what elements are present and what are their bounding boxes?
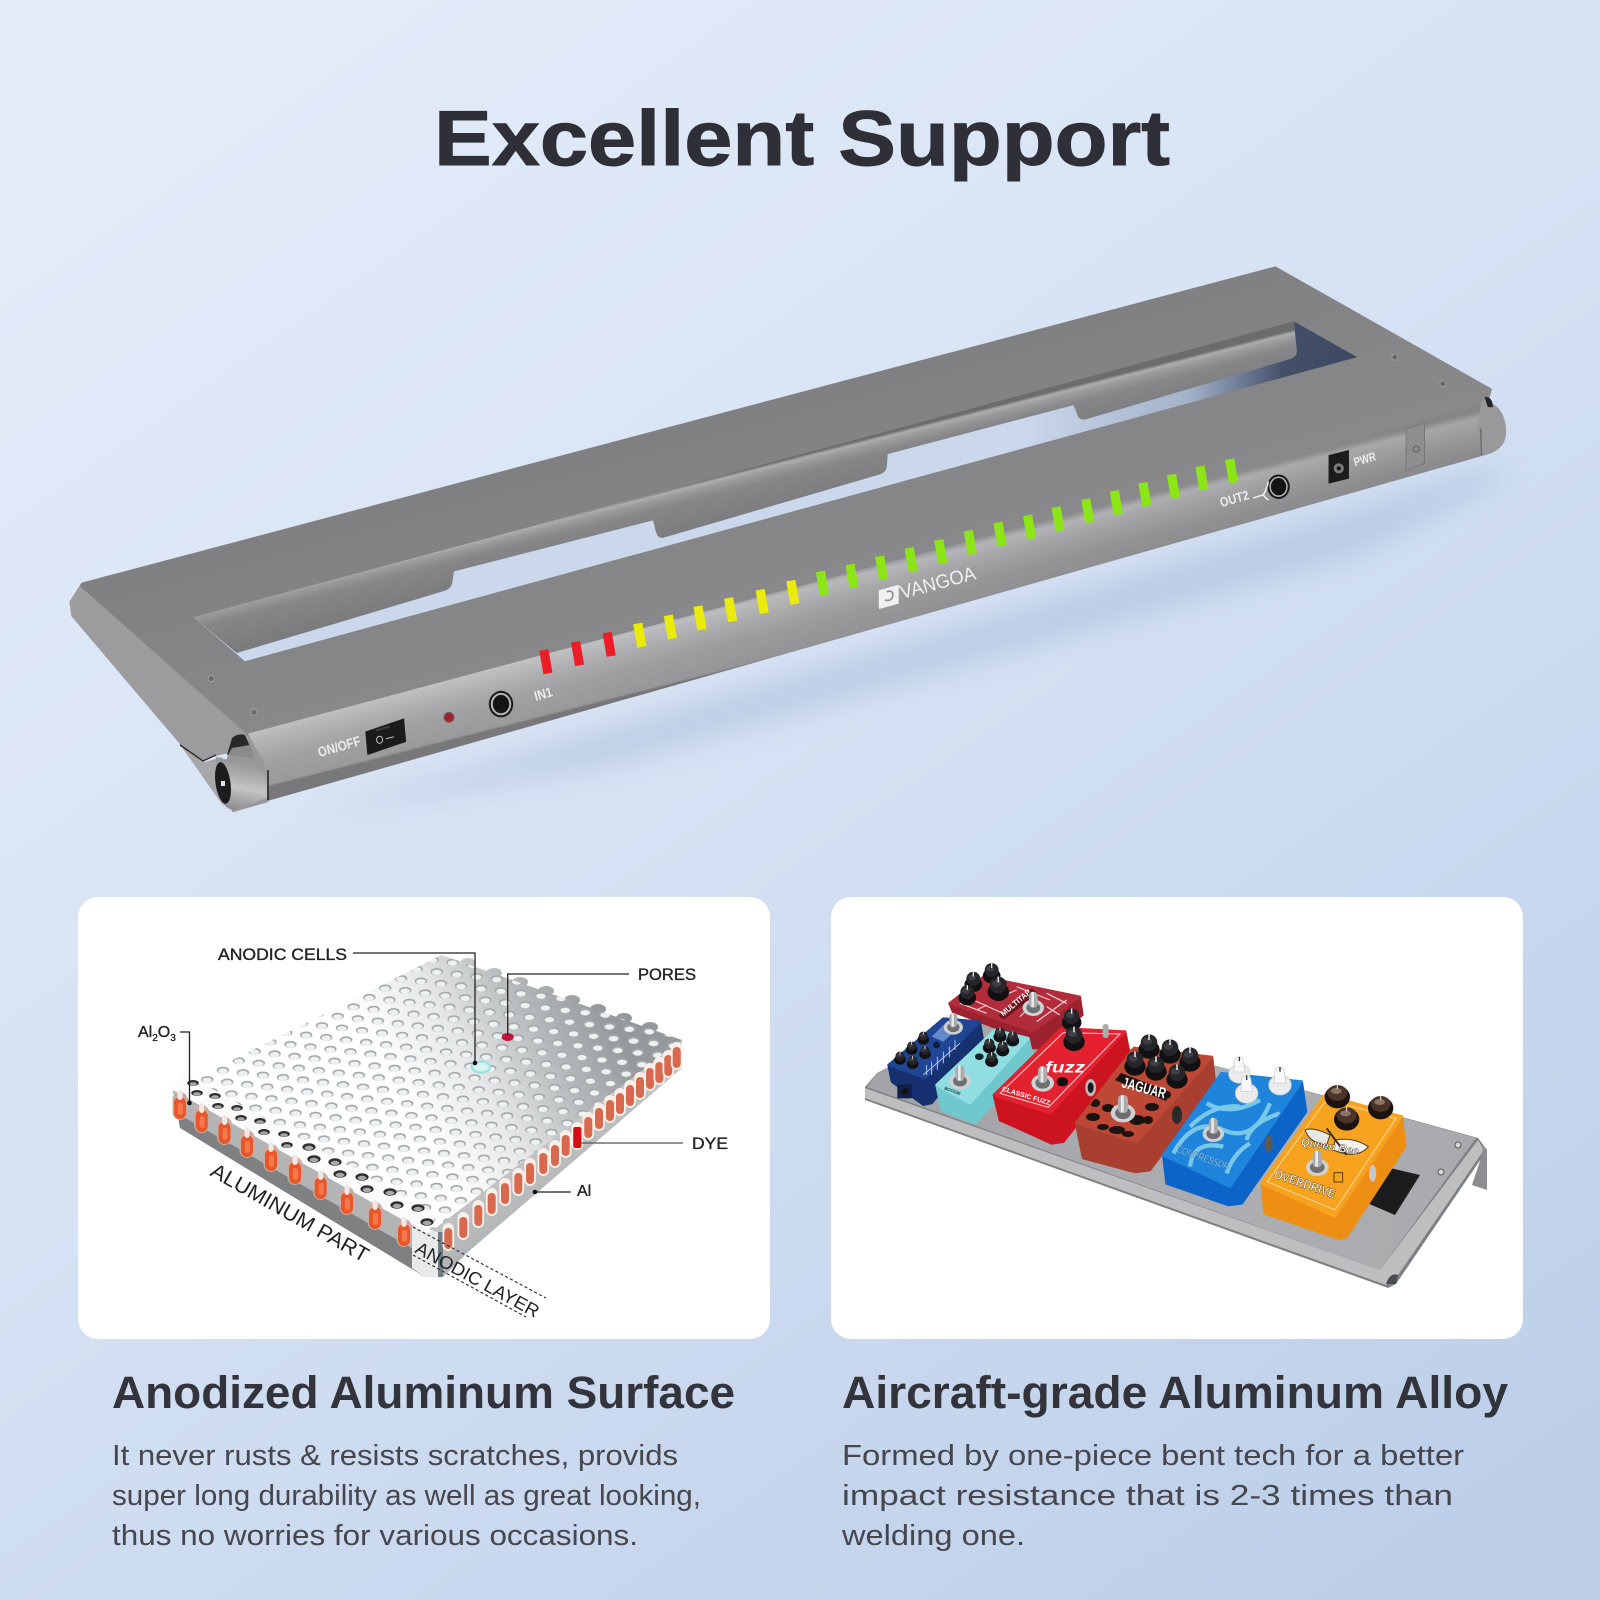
pedal: red fuzz: fuzz — [1045, 1060, 1085, 1077]
pedal: red fuzz: CLASSIC FUZZ — [1001, 1086, 1051, 1107]
dark pores along front-left — [187, 1080, 434, 1226]
left dye tubes — [172, 1090, 412, 1247]
pedal: orange overdrive: Queen Bee — [1300, 1136, 1360, 1158]
hinge barrel — [215, 757, 267, 810]
right hinge — [1478, 397, 1506, 456]
power switch — [365, 718, 406, 755]
board left bent edge — [69, 586, 250, 760]
body copy right: welding one. — [841, 1520, 1025, 1552]
top face — [173, 955, 682, 1234]
pedal: blue compressor: COMPRESSOR — [1175, 1144, 1231, 1173]
title: Excellent Support — [434, 94, 1170, 182]
board top surface — [69, 266, 1492, 739]
right clip — [1406, 423, 1424, 470]
diagram: anodic layer block — [172, 955, 682, 1277]
label aluminum part: ALUMINUM PART — [207, 1159, 373, 1267]
bee wings — [1305, 1129, 1330, 1145]
pedal: teal: BOOGIE — [944, 1086, 962, 1096]
label ON/OFF: ON/OFF — [316, 734, 362, 760]
cut strip — [412, 1226, 443, 1277]
roll curl — [1386, 1274, 1398, 1284]
scalloped back edge — [460, 958, 658, 1032]
pedal: red multi — [949, 963, 1083, 1048]
label IN1: IN1 — [532, 684, 554, 704]
board front face — [248, 403, 1494, 801]
label dye: DYE — [692, 1135, 728, 1153]
slot in plate — [1367, 1168, 1420, 1215]
VANGOA logo: VANGOA — [898, 562, 978, 604]
plate top — [867, 1020, 1476, 1270]
label PWR: PWR — [1352, 450, 1378, 469]
leader dots — [187, 1061, 537, 1194]
right side face — [428, 1040, 682, 1277]
barrel end cap — [213, 761, 233, 805]
pedal: brown jaguar — [1076, 1034, 1215, 1172]
label Al2O3: Al — [138, 1024, 152, 1041]
label OUT2: OUT2 — [1218, 487, 1251, 510]
highlighted dye tube — [573, 1127, 581, 1148]
pedalboard plate — [865, 1020, 1487, 1288]
screws — [208, 354, 1446, 715]
pedal: brown jaguar: JAGUAR — [1120, 1074, 1168, 1103]
pore pattern — [173, 955, 682, 1234]
LED level strip — [544, 459, 1234, 673]
anodic layer dashed bracket — [413, 1227, 546, 1317]
pedal: orange overdrive: OVERDRIVE — [1272, 1167, 1337, 1201]
body copy right: impact resistance that is 2-3 times than — [842, 1480, 1453, 1512]
heading: aircraft-grade aluminum alloy: Aircraft-grade Aluminum Alloy — [842, 1367, 1508, 1418]
pedal: red fuzz — [994, 1009, 1130, 1143]
output jack — [1253, 474, 1290, 500]
cell marker — [472, 1062, 490, 1072]
pedal: navy — [888, 1013, 983, 1105]
bent lip — [1472, 1145, 1487, 1190]
plate rim highlight — [865, 1088, 1484, 1285]
hinge notch — [227, 734, 252, 755]
left feature text — [112, 1367, 735, 1552]
power LED — [444, 712, 454, 722]
label Al2O3: 3 — [170, 1033, 176, 1044]
right dye tubes — [442, 1042, 682, 1251]
label pores: PORES — [638, 966, 696, 984]
body copy left: thus no worries for various occasions. — [112, 1520, 638, 1552]
left side wall upper — [173, 1090, 428, 1257]
slot window — [194, 321, 1357, 661]
label anodic layer: ANODIC LAYER — [412, 1238, 543, 1322]
clean band along front-left — [173, 1073, 436, 1234]
slot flange with notches — [194, 321, 1297, 653]
body copy left: super long durability as well as great looking, — [112, 1480, 701, 1512]
shadow under board — [306, 471, 1520, 816]
power jack — [1329, 450, 1349, 484]
heading: anodized aluminum surface: Anodized Aluminum Surface — [112, 1367, 735, 1418]
pedal: blue compressor — [1163, 1057, 1306, 1205]
label Al: Al — [577, 1183, 591, 1200]
right feature text — [841, 1367, 1508, 1552]
body copy left: It never rusts & resists scratches, provids — [112, 1440, 678, 1472]
pedals group C — [1163, 1057, 1405, 1239]
panel: pedals on board card — [831, 897, 1523, 1339]
pedal: teal — [937, 1027, 1033, 1123]
input jack — [489, 691, 513, 717]
pedal: red multi: MULTITAP — [999, 987, 1033, 1018]
body copy right: Formed by one-piece bent tech for a better — [842, 1440, 1464, 1472]
hinge lower wedge — [181, 746, 224, 807]
pore marker — [502, 1033, 514, 1041]
product: pedalboard hero — [69, 266, 1520, 816]
label anodic cells: ANODIC CELLS — [218, 946, 347, 964]
pedals group A — [888, 963, 1130, 1143]
screws — [1455, 1142, 1461, 1148]
panel: anodized diagram card — [78, 897, 770, 1339]
plate rim — [865, 1020, 1487, 1288]
label Al2O3: O — [158, 1024, 170, 1041]
left hinge — [180, 734, 268, 810]
label Al2O3: 2 — [152, 1033, 158, 1044]
left side face — [173, 1090, 428, 1277]
leader lines — [180, 953, 683, 1192]
hinge backing — [218, 737, 268, 812]
front face right-side shading — [248, 403, 1494, 801]
pedal: orange overdrive — [1262, 1084, 1405, 1239]
